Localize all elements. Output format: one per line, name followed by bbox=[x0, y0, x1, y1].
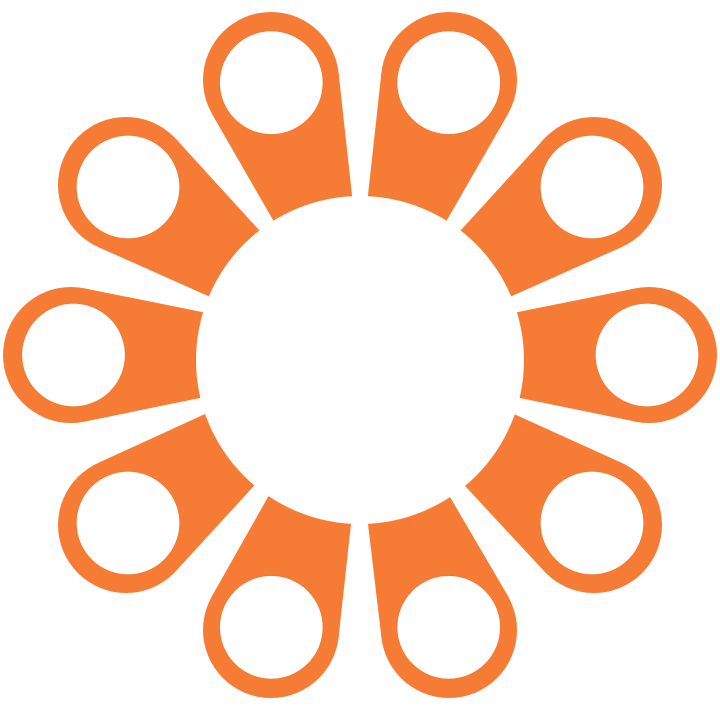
petal: top right bbox=[360, 12, 517, 360]
petal: lower left bbox=[58, 360, 360, 593]
petal: top left bbox=[203, 12, 360, 360]
central white circle bbox=[196, 196, 524, 524]
petal: upper left bbox=[58, 117, 360, 360]
petal: lower right bbox=[360, 360, 662, 593]
petal: bottom right bbox=[360, 360, 517, 698]
petal: bottom left bbox=[203, 360, 360, 698]
petal: upper right bbox=[360, 117, 662, 360]
petal: left bbox=[3, 287, 360, 423]
petal: right bbox=[360, 287, 717, 423]
